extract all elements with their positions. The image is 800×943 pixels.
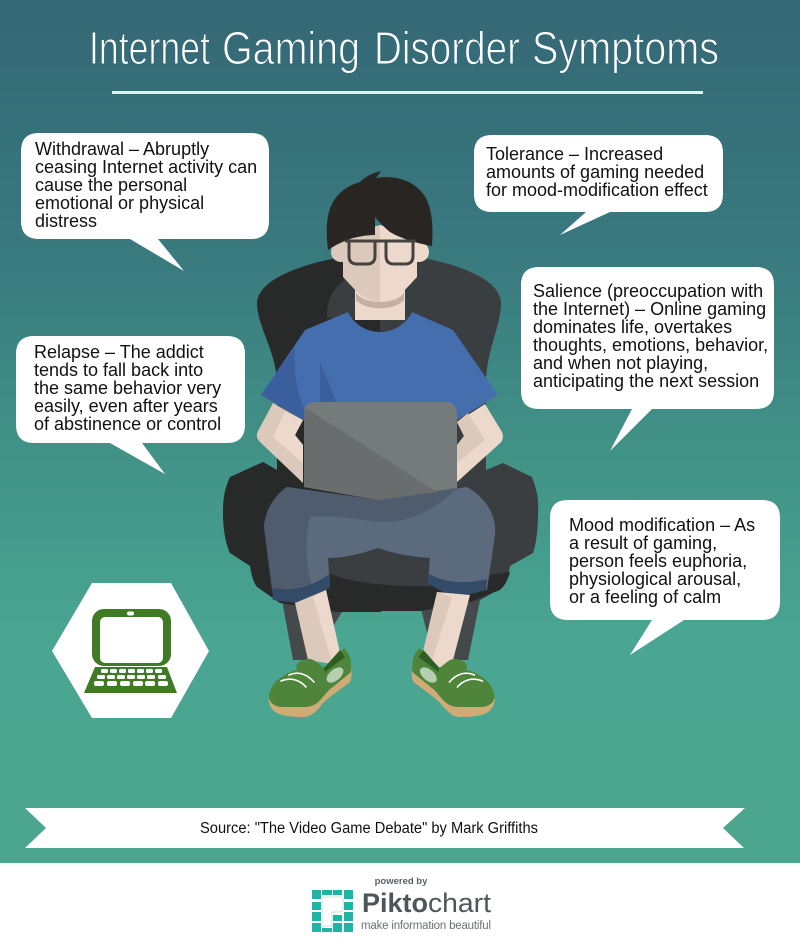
title underline <box>112 91 703 94</box>
callout: salience <box>521 267 774 451</box>
arm: left <box>257 403 303 483</box>
source ribbon: Source: "The Video Game Debate" by Mark Griffiths <box>200 820 538 837</box>
piktochart wordmark: Pikto <box>362 888 428 918</box>
callout: relapse: Relapse – The addict <box>34 342 204 362</box>
callout: tolerance: Tolerance – Increased <box>486 144 663 164</box>
callout: withdrawal: Withdrawal – Abruptly <box>35 139 209 159</box>
callout: relapse: of abstinence or control <box>34 414 221 434</box>
callout: mood modification: or a feeling of calm <box>569 587 721 607</box>
powered by: powered by <box>375 876 428 887</box>
laptop <box>304 402 457 500</box>
title: Internet <box>89 22 210 74</box>
callout: salience: anticipating the next session <box>533 371 759 391</box>
chair legs <box>282 595 481 660</box>
hair <box>327 171 432 250</box>
neck shadow <box>356 293 404 308</box>
illustration: person in armchair <box>223 171 538 717</box>
source ribbon <box>25 808 745 848</box>
piktochart wordmark <box>362 888 492 918</box>
shins <box>295 590 470 668</box>
callout: withdrawal: emotional or physical <box>35 193 204 213</box>
callout: withdrawal: ceasing Internet activity can <box>35 157 257 177</box>
callout: salience: and when not playing, <box>533 353 708 373</box>
icon: laptop in hexagon <box>52 583 209 718</box>
glasses <box>345 241 416 264</box>
shirt <box>261 312 498 420</box>
callout: mood modification <box>550 500 780 655</box>
callout: relapse <box>16 336 245 474</box>
callout: salience: Salience (preoccupation with <box>533 281 763 301</box>
callout: withdrawal: distress <box>35 211 97 231</box>
callout: relapse: the same behavior very <box>34 378 221 398</box>
tagline: make information beautiful <box>361 920 491 932</box>
callout: salience: dominates life, overtakes <box>533 317 732 337</box>
callout: relapse: easily, even after years <box>34 396 218 416</box>
face <box>343 225 417 302</box>
callout: tolerance <box>474 135 723 235</box>
callout: tolerance: amounts of gaming needed <box>486 162 704 182</box>
pants cuffs <box>272 573 487 603</box>
callout: mood modification: Mood modification – As <box>569 515 755 535</box>
callout: mood modification: person feels euphoria, <box>569 551 747 571</box>
piktochart logo mark <box>312 890 353 932</box>
callout: mood modification: a result of gaming, <box>569 533 717 553</box>
title: Disorder <box>374 22 520 74</box>
armchair <box>223 257 538 612</box>
pants <box>264 487 495 603</box>
ears <box>331 242 429 262</box>
shoe: left <box>269 648 352 717</box>
callout: salience: thoughts, emotions, behavior, <box>533 335 768 355</box>
shoe: right <box>412 648 495 717</box>
callout: mood modification: physiological arousal, <box>569 569 741 589</box>
title: Symptoms <box>532 22 719 74</box>
callout: withdrawal <box>21 133 269 271</box>
title: Gaming <box>222 22 360 74</box>
callout: relapse: tends to fall back into <box>34 360 203 380</box>
piktochart wordmark: chart <box>428 888 492 918</box>
title <box>89 22 719 74</box>
footer <box>0 863 800 943</box>
callout: withdrawal: cause the personal <box>35 175 187 195</box>
arm: right <box>457 404 503 482</box>
callout: tolerance: for mood-modification effect <box>486 180 708 200</box>
neck <box>355 285 405 320</box>
callout: salience: the Internet) – Online gaming <box>533 299 766 319</box>
